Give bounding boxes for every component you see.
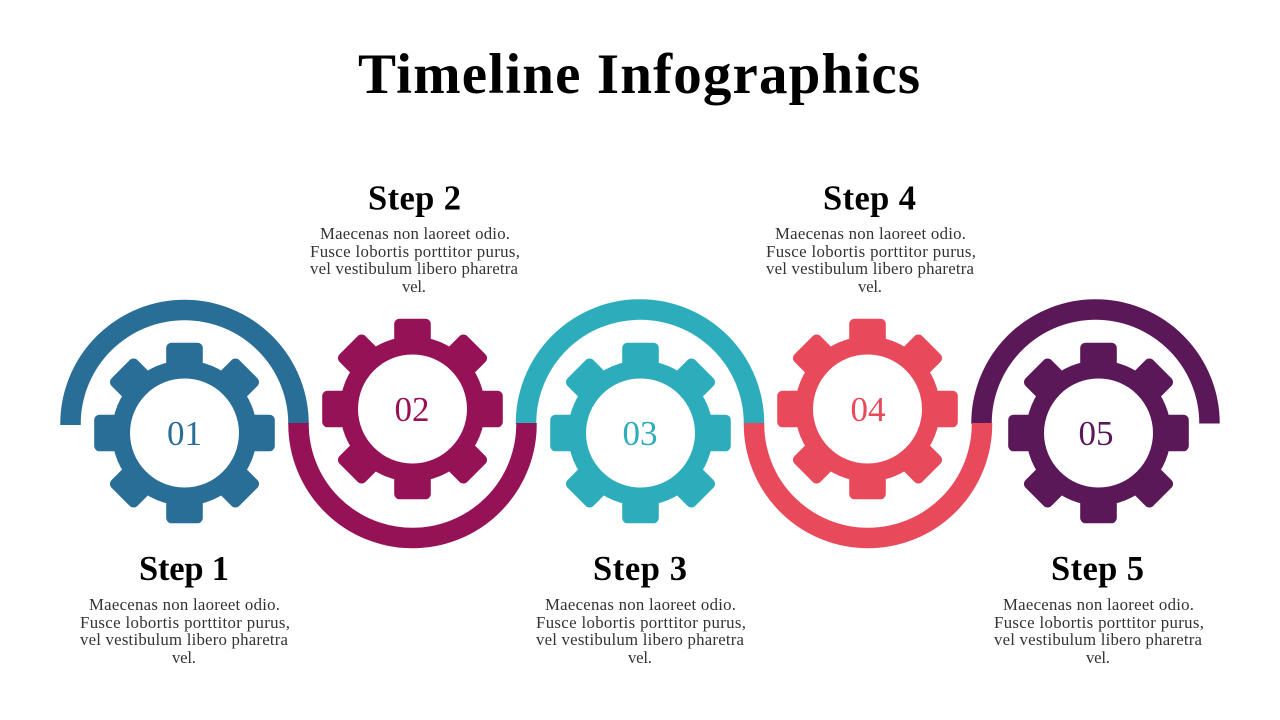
description: step 1: Maecenas non laoreet odio. bbox=[89, 595, 280, 614]
text block: step 5 bbox=[994, 550, 1204, 667]
description: step 2: Fusce lobortis porttitor purus, bbox=[310, 242, 520, 261]
arc: step 1 bbox=[70, 310, 298, 425]
description: step 1 bbox=[80, 595, 290, 667]
description: step 2: vel vestibulum libero pharetra bbox=[310, 259, 519, 278]
heading: step 5: Step 5 bbox=[1051, 550, 1144, 588]
description: step 4: Maecenas non laoreet odio. bbox=[775, 224, 966, 243]
description: step 3 bbox=[536, 595, 746, 667]
number 02: 02 bbox=[394, 390, 430, 429]
description: step 2: Maecenas non laoreet odio. bbox=[320, 224, 510, 243]
description: step 5: Maecenas non laoreet odio. bbox=[1003, 595, 1194, 614]
description: step 1: vel. bbox=[172, 648, 196, 667]
heading: step 1: Step 1 bbox=[139, 550, 229, 588]
description: step 3: vel. bbox=[628, 648, 652, 667]
number 04: 04 bbox=[850, 390, 886, 429]
description: step 1: vel vestibulum libero pharetra bbox=[80, 630, 289, 649]
description: step 5: Fusce lobortis porttitor purus, bbox=[994, 613, 1204, 632]
arc: step 4 bbox=[754, 423, 982, 538]
text block: step 4 bbox=[766, 180, 976, 296]
text block: step 2 bbox=[310, 180, 520, 296]
heading: step 2: Step 2 bbox=[368, 180, 461, 218]
number 03: 03 bbox=[622, 414, 658, 453]
gear: step 2 bbox=[322, 319, 503, 499]
description: step 1: Fusce lobortis porttitor purus, bbox=[80, 613, 290, 632]
gear: step 5 bbox=[1008, 343, 1189, 523]
heading: step 3: Step 3 bbox=[593, 550, 687, 588]
description: step 4: Fusce lobortis porttitor purus, bbox=[766, 242, 976, 261]
description: step 3: Fusce lobortis porttitor purus, bbox=[536, 613, 746, 632]
description: step 3: Maecenas non laoreet odio. bbox=[545, 595, 736, 614]
text block: step 3 bbox=[536, 550, 746, 667]
description: step 4 bbox=[766, 224, 976, 296]
description: step 5: vel vestibulum libero pharetra bbox=[994, 630, 1203, 649]
heading: step 4: Step 4 bbox=[823, 180, 916, 218]
gear: step 3 bbox=[550, 343, 731, 523]
description: step 3: vel vestibulum libero pharetra bbox=[536, 630, 745, 649]
description: step 5 bbox=[994, 595, 1204, 667]
description: step 2 bbox=[310, 224, 520, 296]
description: step 2: vel. bbox=[402, 277, 426, 296]
arc: step 3 bbox=[526, 310, 754, 424]
arc: step 2 bbox=[298, 423, 526, 538]
number 01: 01 bbox=[167, 414, 202, 453]
text block: step 1 bbox=[80, 550, 290, 667]
arc: step 5 bbox=[982, 310, 1210, 424]
gear: step 1 bbox=[94, 343, 275, 523]
title: Timeline Infographics bbox=[358, 43, 920, 106]
description: step 5: vel. bbox=[1086, 648, 1110, 667]
description: step 4: vel. bbox=[858, 277, 882, 296]
number 05: 05 bbox=[1078, 414, 1114, 453]
gear: step 4 bbox=[777, 319, 958, 499]
description: step 4: vel vestibulum libero pharetra bbox=[766, 259, 975, 278]
